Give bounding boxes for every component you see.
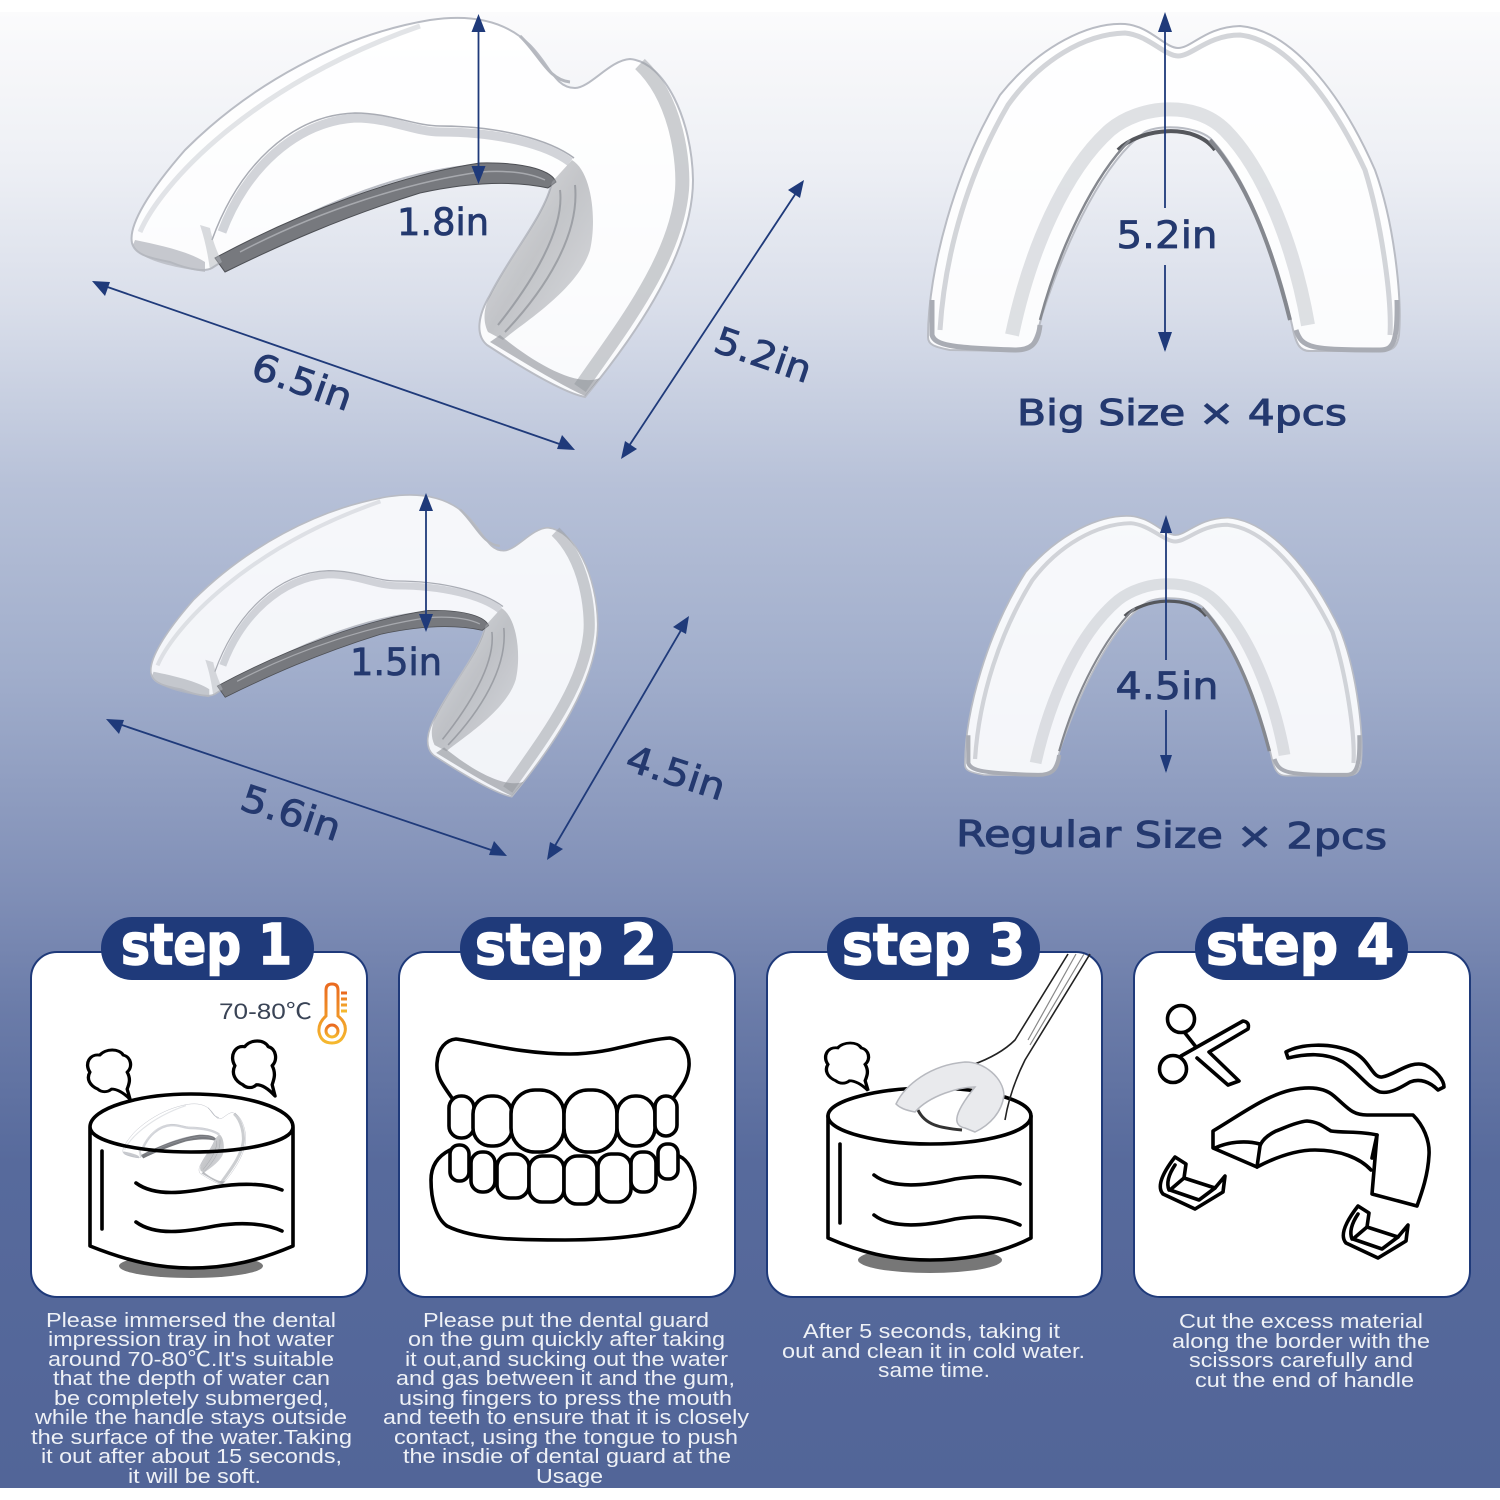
icon: pot of water <box>828 1088 1031 1273</box>
label: 1.5in: 1.5in <box>350 641 442 684</box>
instructions: step 2: it out,and sucking out the water <box>405 1348 728 1371</box>
arrow: front 4.5in <box>1160 515 1172 773</box>
icon: teeth and gums <box>431 1038 695 1240</box>
instructions: step 3: After 5 seconds, taking it <box>803 1320 1060 1343</box>
instructions: step 2: and gas between it and the gum, <box>396 1367 735 1390</box>
instructions: step 3: out and clean it in cold water. <box>782 1340 1085 1363</box>
temperature label: 70-80℃ <box>219 999 312 1024</box>
label: Big Size x 4pcs: Big Size × 4pcs <box>1017 393 1347 434</box>
icon: trimmed border strip <box>1286 1045 1444 1092</box>
instructions: step 1: be completely submerged, <box>54 1387 329 1410</box>
instructions: step 1: around 70-80℃.It's suitable <box>48 1348 334 1371</box>
instructions: step 4: along the border with the <box>1172 1330 1430 1353</box>
icon: spoon holding guard <box>896 954 1090 1132</box>
icon: right cut corner <box>1343 1206 1408 1258</box>
step 3 badge: step 3 <box>842 913 1025 978</box>
arrow: height 1.8in <box>472 14 486 184</box>
label: 5.6in: 5.6in <box>235 776 347 850</box>
instructions: step 2: Usage <box>536 1465 603 1488</box>
instructions: step 1 <box>31 1309 352 1488</box>
instructions: step 2: contact, using the tongue to push <box>394 1426 738 1449</box>
regular size guard, angled view with dimensions <box>106 493 731 860</box>
instructions: step 4: cut the end of handle <box>1195 1369 1414 1392</box>
label: 6.5in: 6.5in <box>246 345 358 420</box>
big size guard, angled view with dimensions <box>92 14 817 459</box>
step 4 badge: step 4 <box>1206 913 1394 978</box>
arrow: width 5.6in <box>106 719 507 856</box>
arrow: depth 4.5in <box>547 616 689 860</box>
panel: step 3 <box>767 913 1102 1297</box>
arrow: depth 5.2in <box>621 180 804 459</box>
label: 5.2in diagonal: 5.2in <box>709 319 817 392</box>
instructions: step 1: Please immersed the dental <box>46 1309 336 1332</box>
instructions: step 2: using fingers to press the mouth <box>399 1387 732 1410</box>
panel: step 2 <box>399 913 735 1297</box>
instructions: step 3 <box>782 1320 1085 1382</box>
icon: pot of hot water with guard <box>90 1094 293 1278</box>
instructions: step 2 <box>383 1309 750 1488</box>
instructions: step 1: it out after about 15 seconds, <box>41 1445 342 1468</box>
regular size guard, front view <box>956 515 1387 858</box>
instructions: step 4: Cut the excess material <box>1179 1310 1423 1333</box>
instructions: step 4: scissors carefully and <box>1189 1349 1413 1372</box>
instructions: step 1: it will be soft. <box>128 1465 261 1488</box>
step 2 badge: step 2 <box>475 913 657 978</box>
instructions: step 2: the insdie of dental guard at the <box>403 1445 731 1468</box>
arrow: height 1.5in <box>419 493 433 632</box>
big size guard, front view <box>928 12 1400 434</box>
label: front 4.5in: 4.5in <box>1116 665 1218 708</box>
instructions: step 2: Please put the dental guard <box>423 1309 709 1332</box>
instructions: step 1: the surface of the water.Taking <box>31 1426 352 1449</box>
instructions: step 2: on the gum quickly after taking <box>408 1328 725 1351</box>
icon: trimmed guard <box>1213 1088 1429 1206</box>
icon: thermometer <box>319 984 347 1043</box>
instructions: step 1: while the handle stays outside <box>34 1406 347 1429</box>
instructions: step 3: same time. <box>878 1359 990 1382</box>
instructions: step 4 <box>1172 1310 1430 1392</box>
panel: step 1 <box>31 913 367 1297</box>
icon: steam puff <box>826 1043 869 1091</box>
panel: step 4 <box>1134 913 1470 1297</box>
label: Regular Size x 2pcs: Regular Size × 2pcs <box>956 814 1387 858</box>
instructions: step 2: and teeth to ensure that it is closely <box>383 1406 750 1429</box>
arrow: front 5.2in <box>1158 12 1172 352</box>
label: 4.5in diagonal: 4.5in <box>621 737 731 809</box>
arrow: width 6.5in <box>92 281 575 450</box>
instructions: step 1: that the depth of water can <box>53 1367 330 1390</box>
icon: left cut corner <box>1160 1157 1225 1209</box>
step 1 badge: step 1 <box>121 913 292 978</box>
label: 1.8in: 1.8in <box>397 201 489 244</box>
icon: steam puffs <box>88 1041 276 1099</box>
icon: scissors <box>1160 1006 1248 1085</box>
label: front 5.2in: 5.2in <box>1116 214 1218 257</box>
instructions: step 1: impression tray in hot water <box>48 1328 334 1351</box>
